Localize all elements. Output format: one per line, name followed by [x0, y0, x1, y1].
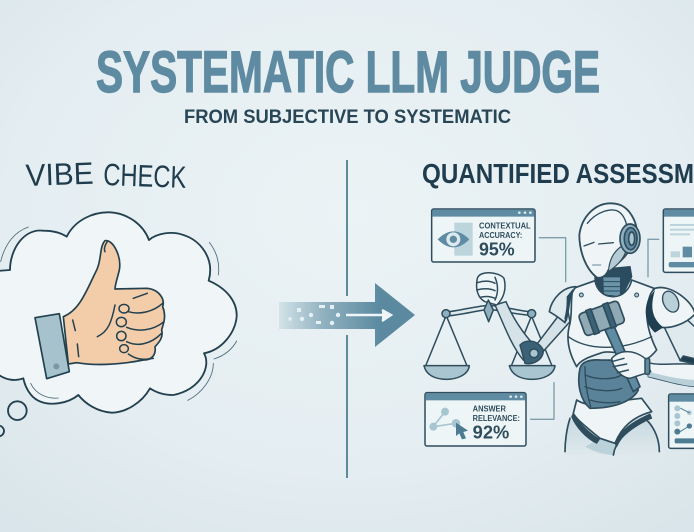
robot fist holding scale — [477, 273, 505, 322]
metric text — [479, 222, 531, 259]
robot torso — [568, 280, 657, 367]
thought bubbles — [0, 401, 27, 436]
robot left arm and forearm — [495, 302, 570, 364]
thought cloud — [0, 212, 237, 413]
heading: vibe check: CHECK — [103, 157, 187, 195]
metric text: ANSWER — [473, 405, 506, 414]
metric text: RELEVANCE: — [473, 414, 520, 423]
metric text: 95% — [479, 238, 515, 259]
panel: contextual accuracy — [432, 209, 535, 262]
robot chest bolts — [579, 293, 639, 297]
metric text — [473, 405, 520, 442]
metric text: CONTEXTUAL — [479, 222, 531, 231]
hand — [63, 241, 165, 364]
robot right shoulder — [648, 287, 694, 328]
panel: flow diagram — [669, 394, 694, 448]
robot ear headphone — [620, 224, 640, 253]
icon: eye — [438, 223, 473, 256]
robot hand holding gavel — [612, 352, 651, 378]
robot left shoulder — [549, 287, 576, 323]
robot neck — [595, 267, 632, 297]
connector lines — [531, 238, 659, 419]
shirt cuff — [35, 314, 69, 379]
robot face plate and eyes — [608, 246, 627, 272]
robot right arm — [648, 310, 694, 387]
robot legs and hips — [565, 398, 659, 455]
robot abdomen — [579, 360, 638, 408]
metric text: 92% — [473, 421, 510, 442]
finger details — [73, 242, 164, 359]
divider — [346, 160, 348, 478]
cloud accent strokes — [1, 227, 237, 400]
arrow: subjective to systematic — [279, 283, 415, 347]
panel: report chart — [663, 209, 694, 272]
heading: vibe check: VIBE — [25, 156, 94, 193]
gavel — [578, 299, 640, 392]
robot head — [579, 203, 637, 278]
metric text: ACCURACY: — [479, 231, 522, 240]
panel: answer relevance — [425, 393, 526, 446]
icon: node graph with cursor — [429, 408, 468, 439]
right illustration: robot judge and metric panels — [424, 203, 694, 455]
subtitle: FROM SUBJECTIVE TO SYSTEMATIC — [184, 106, 511, 128]
left illustration: thought bubble with thumbs up — [0, 212, 237, 436]
balance scale — [424, 305, 555, 379]
heading: vibe check — [25, 156, 187, 195]
